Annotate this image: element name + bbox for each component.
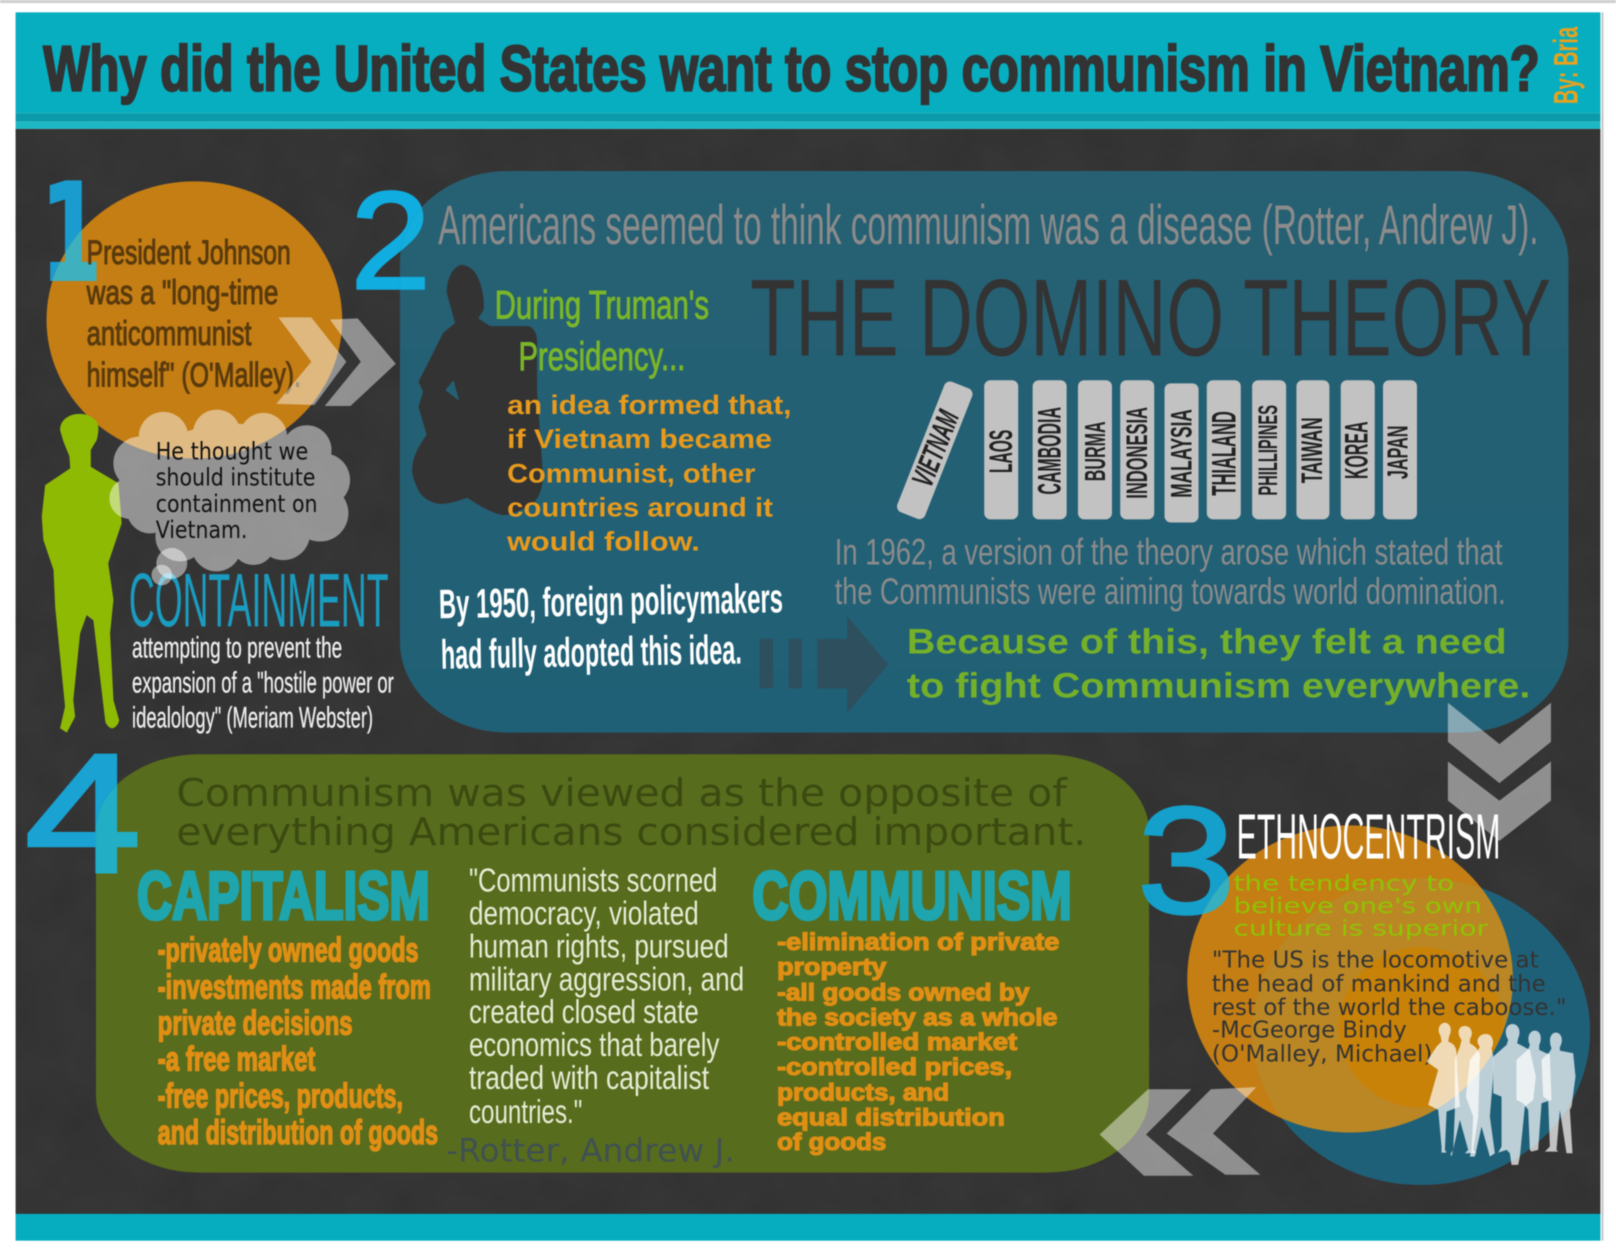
containment definition [132,631,394,734]
communism list: equal distribution [777,1105,1005,1131]
communism heading: COMMUNISM [752,858,1072,934]
domino: Thailand: THIALAND [1206,411,1244,496]
Bundy quote: rest of the world the caboose." [1212,994,1566,1021]
capitalism list [158,931,438,1152]
domino: Vietnam: VIETNAM [905,405,966,491]
domino: Malaysia [1165,383,1199,522]
arrow: dark block arrow [760,616,888,713]
arrow: chevrons to section 2 [276,317,396,406]
domino: Cambodia [1031,380,1067,519]
person silhouette [42,414,122,733]
1962 text [835,531,1506,612]
group of people silhouettes [1427,1023,1576,1165]
domino: Burma: BURMA [1080,421,1112,481]
number 4 overlap tint: 4 [25,719,141,908]
orange circle [1187,825,1513,1132]
communism list: -elimination of private [777,930,1059,956]
policymakers text: By 1950, foreign policymakers [438,575,783,627]
thought text [156,438,318,544]
domino: Indonesia [1120,380,1154,519]
capitalism list: -free prices, products, [158,1078,403,1116]
Truman heading: During Truman's [495,282,709,327]
Rotter quote [469,861,744,1130]
thought text: He thought we [156,438,308,466]
policymakers text [438,575,783,678]
capitalism list: -privately owned goods [158,931,418,969]
Rotter quote: countries." [469,1093,582,1130]
capitalism list: -investments made from [158,969,431,1007]
idea text: countries around it [507,492,773,522]
quote attribution: -Rotter, Andrew J. [446,1131,735,1169]
Rotter quote: democracy, violated [469,894,699,931]
domino row [893,379,1417,522]
number 1 overlap tint: 1 [40,155,102,313]
arrow: chevrons to section 4 [1100,1087,1260,1176]
domino: Korea [1339,380,1375,519]
opposites statement: Communism was viewed as the opposite of [176,771,1068,815]
containment definition: expansion of a "hostile power or [132,666,394,699]
domino: Indonesia: INDONESIA [1121,407,1154,499]
capitalism heading: CAPITALISM [137,858,430,934]
Bundy quote [1212,947,1566,1067]
Rotter quote: economics that barely [469,1026,720,1063]
section 1: Johnson and containment [40,155,396,734]
containment definition: idealology" (Meriam Webster) [132,701,373,734]
ethnocentrism definition: culture is superior [1234,917,1488,942]
domino: Taiwan [1296,380,1329,519]
section 2: the domino theory [412,194,1551,713]
domino: Phillipines: PHILLIPINES [1253,405,1283,496]
domino: Malaysia: MALAYSIA [1165,409,1198,498]
domino: Thailand [1206,380,1244,519]
circle overlap [1202,876,1514,1133]
panel 4: capitalism versus communism background [96,754,1149,1173]
domino: Japan: JAPAN [1383,426,1415,479]
Rotter quote: traded with capitalist [469,1059,709,1096]
Johnson text [86,234,301,394]
idea text: if Vietnam became [507,424,772,454]
text: CONTAINMENT [129,559,389,644]
footer band [16,1214,1600,1241]
Rotter quote: created closed state [469,993,699,1030]
domino: Laos [983,380,1019,519]
policymakers text: had fully adopted this idea. [441,627,742,678]
section 4: communism versus capitalism [137,771,1086,1169]
conclusion text: to fight Communism everywhere. [907,667,1530,706]
Johnson text: was a "long-time [86,274,278,312]
domino: Burma [1078,380,1112,519]
blue circle [1252,878,1590,1185]
domino: Japan [1383,380,1417,519]
idea text [506,390,792,556]
Bundy quote: the head of mankind and the [1212,970,1546,997]
communism list: products, and [777,1081,949,1107]
domino: Taiwan: TAIWAN [1296,417,1329,483]
section 3: ethnocentrism [1137,776,1590,1185]
thought text: should institute [156,463,315,491]
communism list: the society as a whole [777,1005,1057,1031]
conclusion text [907,622,1530,706]
communism list: -controlled market [777,1030,1017,1056]
Johnson text: himself" (O'Malley). [87,356,301,394]
idea text: Communist, other [507,458,756,488]
number 3: 3 [1137,776,1236,946]
capitalism list: -a free market [158,1041,315,1079]
idea text: an idea formed that, [507,390,792,420]
Bundy quote: (O'Malley, Michael) [1212,1040,1432,1067]
communism list: -controlled prices, [777,1055,1012,1081]
number 4: 4 [25,719,141,908]
number 2: 2 [350,164,431,319]
communism list: of goods [777,1130,886,1156]
Truman heading [495,282,709,379]
opposites statement: everything Americans considered important. [176,810,1086,854]
Rotter quote: military aggression, and [469,960,744,997]
capitalism list: and distribution of goods [158,1114,438,1152]
ethnocentrism definition: believe one's own [1234,894,1482,919]
thought bubble trail [151,548,187,585]
Johnson text: anticommunist [87,315,252,353]
seated silhouette [412,265,543,515]
communism list [777,930,1059,1156]
orange circle [46,181,342,459]
ethnocentrism definition: the tendency to [1234,871,1454,896]
thought bubble [109,410,350,571]
Rotter quote: "Communists scorned [469,861,717,898]
domino: Phillipines [1252,380,1286,519]
containment definition: attempting to prevent the [132,631,342,664]
circle overlap: 3 [1137,776,1236,946]
domino: Cambodia: CAMBODIA [1031,407,1067,495]
Johnson text: President Johnson [87,234,291,272]
Bundy quote: "The US is the locomotive at [1212,947,1539,974]
ethnocentrism definition [1234,871,1488,942]
Truman heading: Presidency... [518,334,685,379]
capitalism list: private decisions [158,1005,353,1043]
thought text: containment on [156,490,318,518]
number 1: 1 [40,155,102,313]
arrow: chevrons down to section 3 [1448,703,1551,841]
idea text: would follow. [506,526,700,556]
panel 2: domino theory background [400,171,1568,733]
Rotter quote: human rights, pursued [469,927,729,964]
Bundy quote: -McGeorge Bindy [1212,1017,1407,1044]
number 2 overlap tint: 2 [350,164,431,319]
communism list: property [777,955,887,981]
domino: Vietnam [893,379,977,522]
domino: Laos: LAOS [983,430,1019,473]
thought text: Vietnam. [156,516,247,544]
opposites statement [176,771,1086,854]
communism list: -all goods owned by [777,981,1030,1007]
conclusion text: Because of this, they felt a need [907,622,1507,661]
domino: Korea: KOREA [1339,421,1375,479]
header band [16,12,1600,129]
